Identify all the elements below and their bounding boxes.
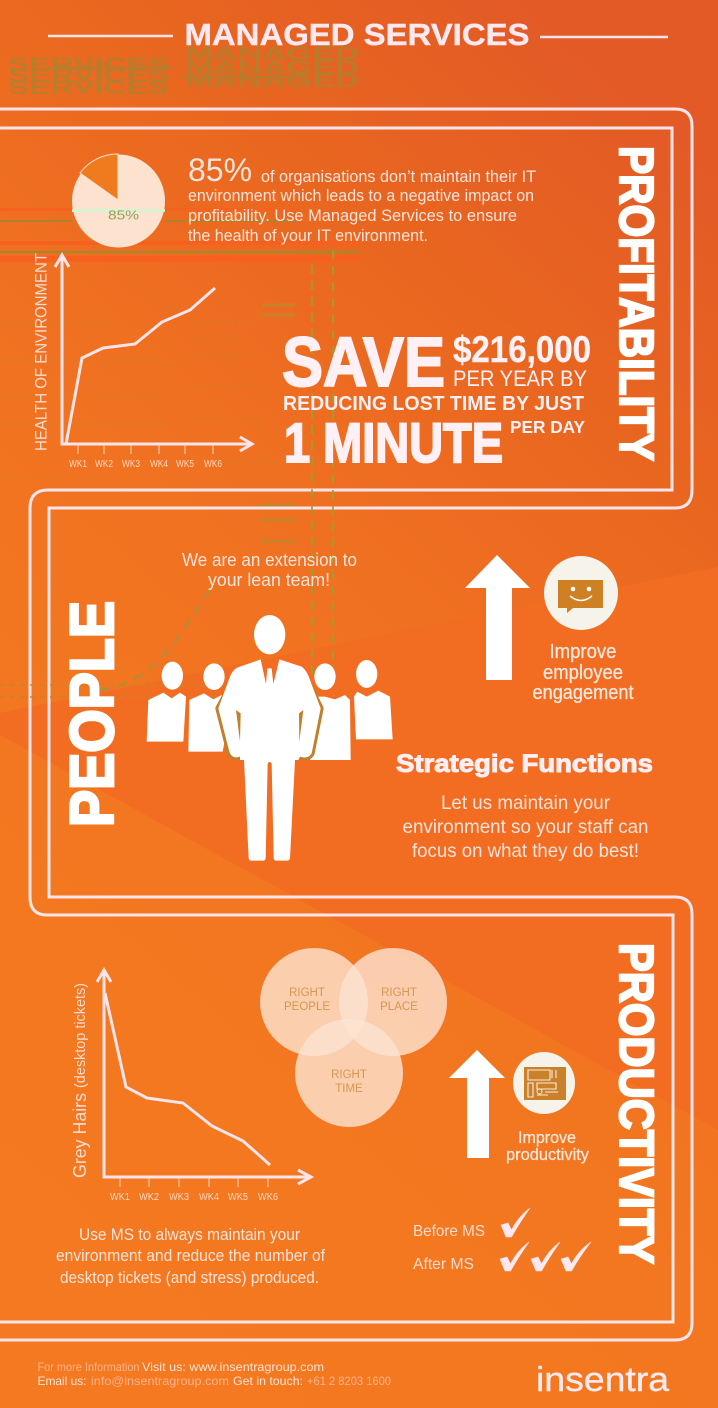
text: strategic functions body: environment so your staff can <box>402 816 648 838</box>
line chart: grey hairs: (desktop tickets) <box>72 983 89 1088</box>
savings callout: 1 MINUTE <box>284 411 503 474</box>
text: use MS: desktop tickets (and stress) produced. <box>60 1269 319 1287</box>
ghost title artifacts: MANAGED <box>185 71 359 92</box>
text: strategic functions body: focus on what they do best! <box>412 840 639 862</box>
before and after ratings: Before MS <box>413 1223 485 1240</box>
text: improve productivity: productivity <box>506 1145 589 1164</box>
glitch artifacts <box>0 208 360 697</box>
before and after ratings: After MS <box>413 1256 474 1273</box>
text: improve employee engagement: employee <box>543 662 623 684</box>
line chart: grey hairs: WK3 <box>169 1192 189 1203</box>
venn diagram: RIGHT <box>381 987 417 999</box>
heading: strategic functions: Strategic Functions <box>396 750 653 778</box>
panel: people <box>58 549 653 862</box>
logo: insentra: insentra <box>536 1361 669 1399</box>
text: improve employee engagement: Improve <box>550 641 616 663</box>
pie chart: 85% <box>72 154 165 248</box>
footer contact: +61 2 8203 1600 <box>307 1374 391 1388</box>
text: strategic functions body: Let us maintain your <box>441 792 610 814</box>
savings callout: PER DAY <box>510 417 585 437</box>
statistic text: environment which leads to a negative impact on <box>188 187 534 205</box>
footer contact: info@insentragroup.com <box>91 1374 229 1388</box>
line chart: health of environment: WK6 <box>204 459 222 470</box>
line chart: grey hairs: WK2 <box>139 1192 159 1203</box>
ghost title artifacts: SERVICES <box>8 66 169 87</box>
line chart: health of environment: WK3 <box>122 459 140 470</box>
line chart: health of environment <box>32 253 252 470</box>
line chart: grey hairs: WK6 <box>258 1192 278 1203</box>
venn diagram: RIGHT <box>331 1069 367 1081</box>
line chart: health of environment: WK1 <box>69 459 87 470</box>
savings callout <box>282 323 591 474</box>
panel: profitability <box>32 146 662 474</box>
text: improve productivity: Improve <box>518 1128 576 1147</box>
panel: productivity <box>56 943 662 1287</box>
line chart: grey hairs: WK5 <box>228 1192 248 1203</box>
savings callout: SAVE <box>282 323 445 401</box>
footer contact: For more Information <box>38 1360 140 1374</box>
venn diagram <box>260 948 447 1127</box>
line chart: grey hairs: Grey Hairs <box>70 1093 90 1178</box>
line chart: grey hairs: WK1 <box>110 1192 130 1203</box>
heading: profitability: PROFITABILITY <box>609 146 662 461</box>
savings callout: $216,000 <box>453 329 591 370</box>
line chart: health of environment: WK5 <box>176 459 194 470</box>
footer contact <box>38 1360 391 1388</box>
line chart: grey hairs <box>70 970 311 1203</box>
statistic text: of organisations don’t maintain their IT <box>261 168 536 186</box>
savings callout: REDUCING LOST TIME BY JUST <box>283 392 584 415</box>
heading: productivity: PRODUCTIVITY <box>609 943 662 1264</box>
line chart: grey hairs: WK4 <box>199 1192 219 1203</box>
line chart: health of environment: WK4 <box>150 459 168 470</box>
text: extension <box>182 549 357 590</box>
statistic text: 85% <box>188 152 252 188</box>
ghost title artifacts: MANAGED <box>185 58 359 79</box>
footer contact: Email us: <box>38 1374 86 1388</box>
text: strategic functions body <box>402 792 648 862</box>
arrow: up <box>465 555 530 680</box>
arrow: up <box>449 1050 505 1158</box>
icon: team of people <box>147 615 393 861</box>
line chart: health of environment: HEALTH OF ENVIRONMENT <box>32 253 50 451</box>
text: use MS: environment and reduce the number of <box>56 1247 325 1265</box>
venn diagram: TIME <box>335 1083 363 1095</box>
venn diagram: RIGHT <box>289 987 325 999</box>
line chart: health of environment: WK2 <box>95 459 113 470</box>
ghost title artifacts: SERVICES <box>8 78 169 99</box>
statistic text: profitability. Use Managed Services to ensure <box>188 207 517 225</box>
savings callout: PER YEAR BY <box>453 366 587 391</box>
footer contact: Get in touch: <box>233 1374 303 1388</box>
text: extension: your lean team! <box>208 569 330 590</box>
icon: smiling chat bubble <box>544 556 618 630</box>
statistic text <box>188 152 536 245</box>
text: extension: We are an extension to <box>182 549 357 570</box>
text: improve employee engagement <box>532 641 634 704</box>
icon: blueprint <box>513 1052 575 1114</box>
pie chart: 85%: 85% <box>108 208 140 222</box>
text: use MS <box>56 1226 325 1287</box>
ghost title artifacts <box>8 44 359 99</box>
statistic text: the health of your IT environment. <box>188 227 428 245</box>
title: MANAGED SERVICES <box>184 17 530 52</box>
footer contact: Visit us: www.insentragroup.com <box>142 1360 324 1374</box>
heading: people: PEOPLE <box>58 601 126 827</box>
before and after ratings <box>413 1208 591 1273</box>
ghost title artifacts: MANAGED <box>185 44 359 65</box>
venn diagram: PLACE <box>380 1001 418 1013</box>
text: use MS: Use MS to always maintain your <box>79 1226 300 1244</box>
text: improve employee engagement: engagement <box>532 682 634 704</box>
text: improve productivity <box>506 1128 589 1164</box>
ghost title artifacts: SERVICES <box>8 55 169 76</box>
venn diagram: PEOPLE <box>284 1001 330 1013</box>
